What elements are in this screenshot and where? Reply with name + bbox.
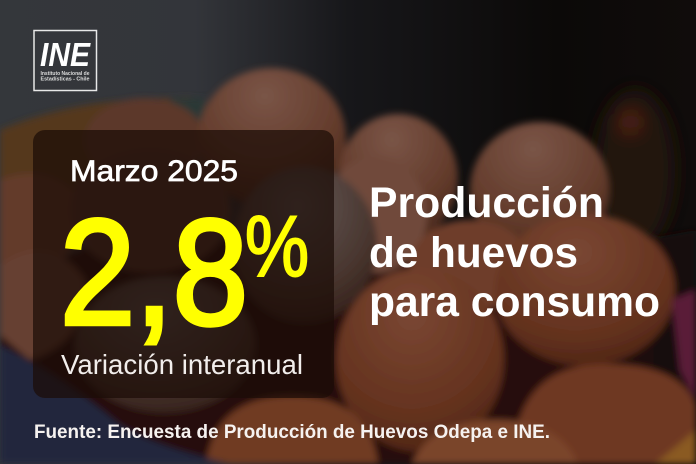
dark translucent panel [33,130,334,398]
date heading: Marzo 2025 [70,155,238,188]
INE logo: Estadísticas - Chile [40,76,90,82]
key figure: 2,8 [60,188,248,356]
INE logo: INE [40,36,91,73]
figure caption: Variación interanual [61,349,303,380]
title: de huevos [369,229,578,277]
title: Producción [369,179,604,227]
title: para consumo [369,278,660,326]
INE logo: Instituto Nacional de [40,71,90,77]
INE logo [34,30,96,90]
title [369,179,660,326]
percent sign: % [245,199,309,295]
source note: Fuente: Encuesta de Producción de Huevos Odepa e INE. [34,422,550,443]
